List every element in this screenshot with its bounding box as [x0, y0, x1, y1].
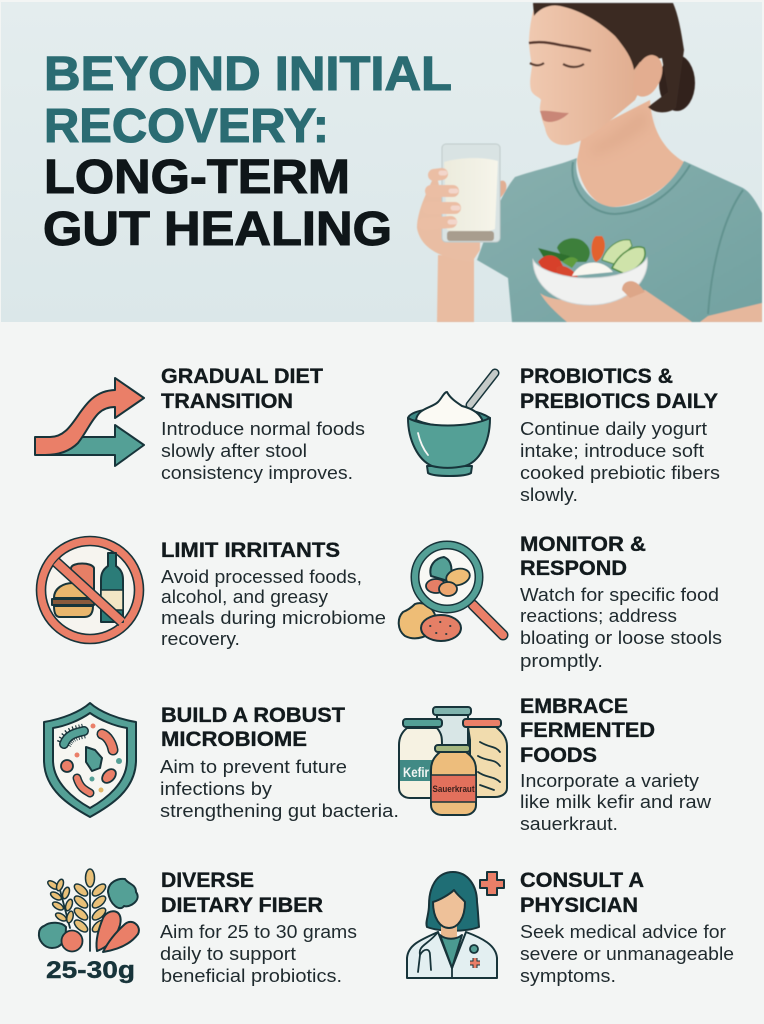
panel: embrace fermented foods	[399, 695, 712, 834]
body text: cooked prebiotic fibers	[520, 462, 720, 483]
body text: recovery.	[161, 628, 240, 649]
body text: meals during microbiome	[161, 607, 386, 628]
title: RECOVERY:	[44, 100, 329, 153]
icon: fermented food jars: Kefir	[403, 764, 429, 780]
heading: MICROBIOME	[161, 728, 307, 751]
body text: severe or unmanageable	[520, 943, 734, 964]
left forearm	[437, 255, 474, 322]
body text: slowly after stool	[161, 440, 307, 461]
icon: magnifier over foods	[399, 545, 503, 641]
body text	[161, 566, 386, 649]
body text: sauerkraut.	[520, 813, 618, 834]
body text: reactions; address	[520, 605, 677, 626]
icon: crossing arrows	[35, 378, 144, 466]
panel: gradual diet transition	[35, 365, 365, 483]
heading: FERMENTED	[520, 719, 655, 742]
body text: beneficial probiotics.	[161, 965, 342, 986]
heading	[520, 695, 655, 767]
heading: GRADUAL DIET	[161, 365, 323, 388]
heading	[161, 869, 323, 917]
body text: intake; introduce soft	[520, 440, 704, 461]
heading	[520, 533, 646, 580]
heading: DIVERSE	[161, 869, 254, 892]
title: GUT HEALING	[43, 203, 392, 256]
bowl of vegetables	[533, 236, 647, 305]
heading	[520, 869, 644, 917]
icon: fermented food jars: Sauerkraut	[432, 784, 475, 795]
glass of milk	[442, 144, 500, 242]
title: LONG-TERM	[44, 151, 350, 204]
heading: PROBIOTICS &	[520, 365, 673, 388]
body text: alcohol, and greasy	[161, 586, 329, 607]
panel: consult a physician	[407, 869, 734, 986]
icon: prohibited junk food	[36, 536, 144, 644]
body text: Aim for 25 to 30 grams	[160, 921, 357, 942]
heading: BUILD A ROBUST	[161, 704, 345, 727]
body text	[520, 921, 734, 986]
hero background	[1, 2, 762, 322]
body text: symptoms.	[520, 965, 616, 986]
heading: TRANSITION	[161, 390, 293, 413]
closed eyes	[530, 63, 584, 67]
shirt	[477, 158, 762, 322]
panel: build a robust microbiome	[44, 703, 399, 821]
finger nails	[441, 173, 458, 222]
panel: diverse dietary fiber	[39, 869, 357, 986]
shirt collar and sleeve seam	[572, 162, 743, 314]
icon: grains and vegetables	[39, 869, 139, 952]
heading: MONITOR &	[520, 533, 646, 556]
left hand palm	[417, 172, 480, 262]
neck shadow	[590, 106, 650, 156]
hero panel	[1, 2, 762, 322]
heading: PHYSICIAN	[520, 894, 638, 917]
ear	[634, 55, 662, 97]
heading: LIMIT IRRITANTS	[161, 539, 340, 562]
fingers on glass	[424, 174, 455, 224]
body text: infections by	[160, 778, 273, 799]
icon: yogurt bowl with spoon	[408, 373, 495, 476]
heading: PREBIOTICS DAILY	[520, 390, 718, 413]
photo: woman with glass of milk and bowl of vegetables	[417, 3, 762, 322]
title	[43, 48, 452, 256]
heading: EMBRACE	[520, 695, 628, 718]
heading: RESPOND	[520, 557, 627, 580]
body text: consistency improves.	[161, 462, 353, 483]
body text: bloating or loose stools	[520, 627, 722, 648]
heading: CONSULT A	[520, 869, 644, 892]
body text: promptly.	[520, 650, 603, 671]
heading: FOODS	[520, 744, 597, 767]
body text	[520, 418, 720, 505]
panel: monitor and respond	[399, 533, 722, 671]
heading: DIETARY FIBER	[161, 894, 323, 917]
right hand and forearm	[540, 290, 762, 322]
body text: slowly.	[520, 484, 578, 505]
body text	[520, 584, 722, 671]
body text: Aim to prevent future	[160, 756, 347, 777]
body text: Seek medical advice for	[520, 921, 726, 942]
body text: daily to support	[160, 943, 296, 964]
hair bun	[659, 55, 695, 111]
body text: Incorporate a variety	[520, 770, 700, 791]
body text: Continue daily yogurt	[520, 418, 707, 439]
heading	[520, 365, 718, 413]
body text	[520, 770, 712, 834]
body text	[161, 418, 365, 483]
hair	[533, 3, 684, 112]
title: BEYOND INITIAL	[44, 48, 452, 101]
thumb on bowl	[622, 281, 645, 298]
body text: Introduce normal foods	[161, 418, 365, 439]
panel: limit irritants	[36, 536, 386, 649]
heading	[161, 704, 345, 751]
face	[529, 3, 655, 145]
body text	[160, 756, 399, 821]
icon: doctor with medical cross	[407, 872, 504, 978]
body text: Avoid processed foods,	[161, 566, 362, 587]
body text: Watch for specific food	[520, 584, 719, 605]
body text: strengthening gut bacteria.	[160, 800, 399, 821]
25-30g label: 25-30g	[46, 957, 135, 984]
icon: shield with microbes	[44, 703, 136, 817]
neck	[577, 100, 684, 207]
body text	[160, 921, 357, 986]
eyebrow	[529, 42, 591, 51]
icon: fermented food jars	[399, 707, 507, 815]
lips	[540, 111, 569, 122]
heading	[161, 365, 323, 413]
body text: like milk kefir and raw	[520, 791, 712, 812]
thumb behind glass	[494, 181, 506, 204]
panel: probiotics and prebiotics	[408, 365, 720, 505]
